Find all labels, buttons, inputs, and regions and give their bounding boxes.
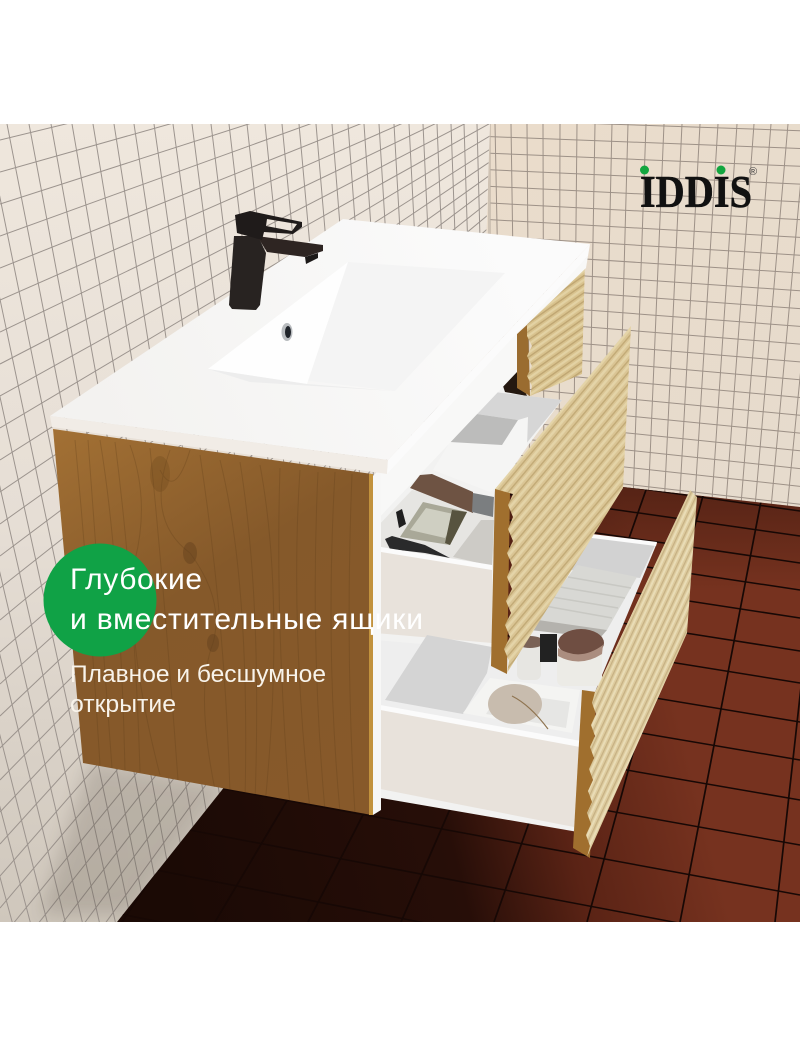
drain overflow <box>282 323 292 341</box>
folded towel in lower drawer <box>530 565 637 638</box>
upper drawer back panel <box>470 391 562 445</box>
countertop <box>50 219 590 474</box>
white fascia under countertop <box>373 256 588 523</box>
small trimmer <box>396 509 406 528</box>
vanity cabinet <box>50 211 697 858</box>
upper closed drawer wood edge <box>517 324 530 396</box>
subheading line two: открытие <box>70 691 176 718</box>
heading second line: и вместительные ящики <box>70 603 423 636</box>
floor tiles <box>117 487 800 922</box>
infographic scene <box>0 124 800 922</box>
sink basin <box>208 262 505 391</box>
upper drawer floor <box>376 490 497 568</box>
lower drawer side panel <box>375 704 581 827</box>
tray <box>463 678 580 733</box>
cabinet side panel with wood grain <box>53 429 373 815</box>
lower drawer floor mat <box>385 635 492 714</box>
black brush <box>385 536 450 558</box>
folded towel in upper drawer <box>453 520 494 566</box>
lower drawer back and interior <box>375 535 657 745</box>
subheading line one: Плавное и бесшумное <box>70 661 326 688</box>
logo: IDDIS: ® <box>749 166 757 178</box>
glass bottle <box>400 502 467 545</box>
upper drawer side panel <box>375 546 492 643</box>
cosmetic jar with bronze lid <box>557 629 604 686</box>
white band: top <box>0 0 800 124</box>
middle drawer ribbed front <box>495 326 631 673</box>
black faucet <box>229 211 323 310</box>
small jar <box>516 636 544 680</box>
dark gap behind the drawers <box>503 370 527 396</box>
drawer interior base <box>374 372 590 832</box>
background wall: right mosaic tiles <box>480 120 800 530</box>
white strip at cabinet front <box>373 470 381 815</box>
middle drawer wood edge <box>491 489 510 674</box>
logo: IDDIS: IDDIS <box>640 167 752 217</box>
heading: Глубокие <box>70 563 202 596</box>
green accent circle <box>44 544 156 656</box>
background wall: left mosaic tiles <box>0 120 500 925</box>
lower drawer back panel <box>570 534 657 578</box>
white band: bottom <box>0 922 800 1047</box>
hair dryer <box>410 474 494 517</box>
dark accessory <box>540 634 557 662</box>
lower drawer wood edge <box>573 690 596 858</box>
upper closed ribbed drawer front <box>527 261 585 396</box>
storage box <box>433 413 528 492</box>
pumice stone <box>488 684 548 729</box>
lower drawer ribbed front <box>586 490 697 857</box>
